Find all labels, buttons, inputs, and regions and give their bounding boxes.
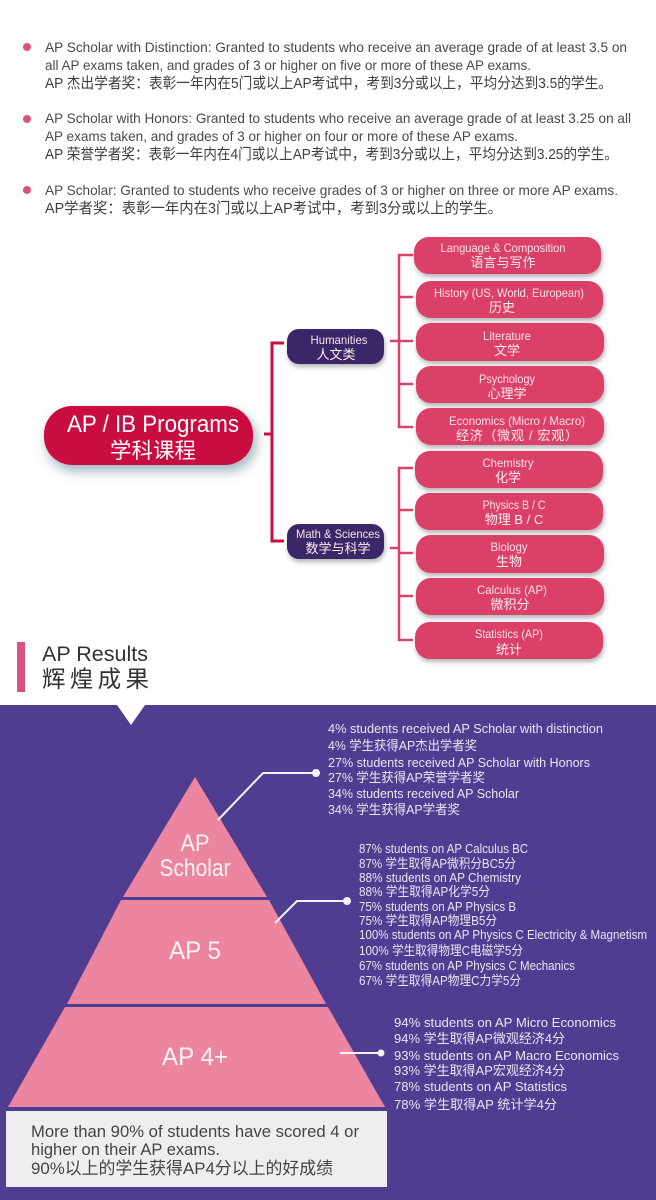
callout: summary box: [6, 1111, 387, 1187]
node: AP / IB Programs: AP / IB Programs: [67, 411, 239, 438]
connector: math and sciences bracket: [390, 468, 413, 640]
node: Humanities: Humanities: [310, 333, 368, 347]
panel: award descriptions: [23, 39, 631, 217]
node: Humanities: [287, 329, 384, 364]
callout: AP 4+ pointer: [340, 1050, 384, 1056]
pyramid tier: AP Scholar: AP: [180, 830, 210, 857]
heading: AP Results: [17, 642, 149, 692]
pyramid tier: AP Scholar: [123, 777, 267, 897]
text block: AP 5 results: 67% students on AP Physics C Mechanics: [359, 958, 575, 973]
subject: Biology: [416, 535, 604, 573]
subject: Statistics: [415, 622, 603, 659]
subject: Calculus: Calculus (AP): [477, 583, 547, 597]
subject: Literature: 文学: [494, 343, 520, 358]
award: AP Scholar with Honors: AP exams taken, and grades of 3 or higher on four or more of these AP exams.: [45, 128, 518, 144]
text block: AP 5 results: 87% 学生取得AP微积分BC5分: [359, 856, 516, 871]
text block: AP 5 results: 87% students on AP Calculus BC: [359, 841, 528, 856]
text block: AP Scholar results: 4% students received AP Scholar with distinction: [328, 721, 603, 736]
callout: summary box: More than 90% of students have scored 4 or: [31, 1122, 359, 1141]
text block: AP Scholar results: 4% 学生获得AP杰出学者奖: [328, 738, 477, 753]
text block: AP 5 results: 88% students on AP Chemistry: [359, 870, 521, 885]
subject: Chemistry: [415, 451, 603, 488]
subject: History: 历史: [489, 300, 515, 315]
subject: Language and Composition: 语言与写作: [470, 255, 536, 270]
node: AP / IB Programs: 学科课程: [110, 439, 196, 463]
callout: summary box: 90%以上的学生获得AP4分以上的好成绩: [31, 1159, 333, 1178]
pyramid tier: AP 5: [67, 900, 326, 1004]
connector: main bracket: [264, 343, 284, 541]
subject: Physics: Physics B / C: [482, 498, 546, 512]
award: AP Scholar with Distinction: [23, 39, 627, 92]
text block: AP Scholar results: 34% 学生获得AP学者奖: [328, 802, 460, 817]
award: AP Scholar with Honors: AP 荣誉学者奖：表彰一年内在4门或以上AP考试中，考到3分或以上，平均分达到3.25的学生。: [45, 145, 618, 163]
subject: Economics: [416, 408, 604, 445]
text block: AP 4+ results: 78% 学生取得AP 统计学4分: [394, 1097, 557, 1112]
subject: Statistics: 统计: [496, 642, 522, 657]
subject: Psychology: [416, 366, 604, 403]
callout: summary box: higher on their AP exams.: [31, 1140, 220, 1159]
node: AP / IB Programs: [44, 406, 253, 465]
text block: AP 5 results: 75% 学生取得AP物理B5分: [359, 913, 497, 928]
subject: Calculus: [416, 578, 604, 615]
subject: Literature: [416, 323, 604, 361]
text block: AP 4+ results: 94% students on AP Micro Economics: [394, 1015, 616, 1030]
subject: Chemistry: 化学: [495, 470, 521, 485]
subject: History: History (US, World, European): [434, 286, 584, 300]
pyramid tier: AP 4+: [8, 1007, 385, 1107]
heading: AP Results: AP Results: [42, 643, 148, 666]
text block: AP Scholar results: 27% 学生获得AP荣誉学者奖: [328, 770, 485, 785]
callout: AP Scholar pointer: [218, 769, 320, 820]
subject: Physics: [415, 493, 603, 530]
text block: AP 5 results: 67% 学生取得AP物理C力学5分: [359, 973, 521, 988]
heading: AP Results: 辉煌成果: [42, 666, 149, 692]
text block: AP 4+ results: 93% students on AP Macro Economics: [394, 1048, 619, 1063]
node: Humanities: 人文类: [316, 347, 356, 362]
chart: results pyramid: [8, 777, 385, 1107]
pyramid tier: AP 5: AP 5: [169, 937, 221, 965]
award: AP Scholar with Honors: [23, 110, 631, 163]
award: AP Scholar: AP Scholar: Granted to students who receive grades of 3 or higher on three or more AP exams.: [45, 182, 618, 198]
node: Math and Sciences: [287, 524, 384, 559]
award: AP Scholar with Distinction: AP 杰出学者奖：表彰一年内在5门或以上AP考试中，考到3分或以上，平均分达到3.5的学生。: [45, 74, 612, 92]
award: AP Scholar with Distinction: all AP exams taken, and grades of 3 or higher on five or more of these AP exams.: [45, 57, 531, 73]
text block: AP 4+ results: 93% 学生取得AP宏观经济4分: [394, 1063, 565, 1078]
panel: results background: [0, 705, 656, 1200]
subject: History: [416, 281, 603, 318]
subject: Physics: 物理 B / C: [485, 512, 543, 527]
award: AP Scholar: AP学者奖：表彰一年内在3门或以上AP考试中，考到3分或以上的学生。: [45, 199, 502, 217]
text block: AP Scholar results: [328, 721, 603, 817]
subject: Literature: Literature: [483, 329, 531, 343]
node: Math and Sciences: Math & Sciences: [296, 527, 380, 541]
award: AP Scholar with Honors: AP Scholar with Honors: Granted to students who receive an average grade of at least 3.25 on all: [45, 110, 631, 126]
subject: Language and Composition: Language & Composition: [440, 241, 566, 255]
subject: Economics: Economics (Micro / Macro): [449, 414, 585, 428]
subject: Statistics: Statistics (AP): [475, 627, 543, 641]
connector: humanities bracket: [390, 255, 413, 427]
text block: AP 4+ results: [394, 1015, 619, 1112]
text block: AP 5 results: 75% students on AP Physics B: [359, 899, 516, 914]
node: Math and Sciences: 数学与科学: [305, 541, 371, 556]
text block: AP Scholar results: 27% students received AP Scholar with Honors: [328, 755, 590, 770]
text block: AP 4+ results: 78% students on AP Statistics: [394, 1079, 567, 1094]
text block: AP 4+ results: 94% 学生取得AP微观经济4分: [394, 1031, 565, 1046]
diagram: AP / IB programs tree: [44, 237, 604, 659]
text block: AP 5 results: 100% 学生取得物理C电磁学5分: [359, 943, 523, 958]
pyramid tier: AP 4+: AP 4+: [162, 1043, 228, 1071]
callout: AP 5 pointer: [275, 897, 351, 923]
text block: AP 5 results: 88% 学生取得AP化学5分: [359, 884, 490, 899]
text block: AP Scholar results: 34% students received AP Scholar: [328, 786, 520, 801]
subject: Biology: Biology: [490, 540, 528, 554]
award: AP Scholar: [23, 182, 618, 217]
subject: Economics: 经济（微观 / 宏观）: [456, 428, 578, 443]
text block: AP 5 results: [359, 841, 647, 988]
subject: Calculus: 微积分: [490, 597, 530, 612]
pyramid tier: AP Scholar: Scholar: [160, 855, 231, 882]
subject: Psychology: 心理学: [487, 386, 527, 401]
subject: Psychology: Psychology: [479, 372, 535, 386]
subject: Chemistry: Chemistry: [482, 456, 534, 470]
subject: Biology: 生物: [496, 554, 522, 569]
subject: Language and Composition: [414, 237, 601, 274]
award: AP Scholar with Distinction: AP Scholar with Distinction: Granted to students who receive an average grade of at least 3.5 on: [45, 39, 627, 55]
